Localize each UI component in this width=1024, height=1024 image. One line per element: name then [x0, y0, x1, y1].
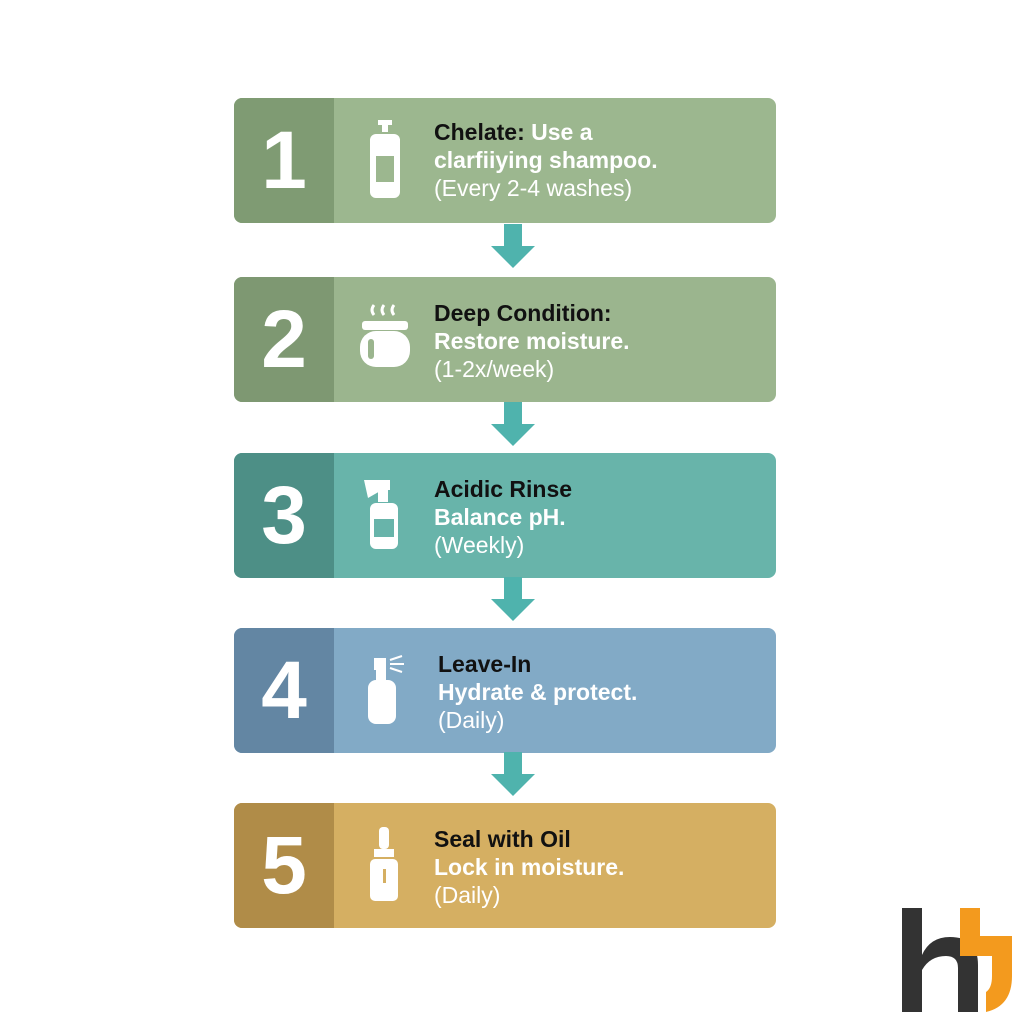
icon: mist spray [368, 655, 404, 724]
arrow 4 [491, 752, 535, 796]
text 4: Leave-In [438, 651, 531, 677]
step 1 card [234, 98, 776, 223]
text 2 [434, 300, 630, 382]
number 3 [234, 453, 334, 578]
logo [902, 908, 1012, 1012]
number 3: 3 [261, 470, 307, 561]
number 1 [234, 98, 334, 223]
text 2: (1-2x/week) [434, 356, 554, 382]
icon: shampoo bottle [370, 120, 400, 198]
text 4 [438, 651, 637, 733]
number 4: 4 [261, 645, 307, 736]
text 5: (Daily) [434, 882, 500, 908]
step 5 card [234, 803, 776, 928]
text 1 [434, 119, 658, 201]
text 5 [434, 826, 624, 908]
icon: dropper bottle [370, 827, 398, 901]
icon: spray bottle [364, 480, 398, 549]
text 2: Deep Condition: [434, 300, 612, 326]
arrow 3 [491, 577, 535, 621]
text 3: (Weekly) [434, 532, 524, 558]
number 5 [234, 803, 334, 928]
number 1: 1 [261, 115, 307, 206]
number 2 [234, 277, 334, 402]
number 5: 5 [261, 820, 307, 911]
arrow 2 [491, 402, 535, 446]
text 3: Acidic Rinse [434, 476, 572, 502]
step 2 card [234, 277, 776, 402]
arrow 1 [491, 224, 535, 268]
icon: conditioner jar [360, 304, 410, 367]
text 1: Chelate: Use a [434, 119, 593, 145]
step 3 card [234, 453, 776, 578]
text 2: Restore moisture. [434, 328, 630, 354]
number 2: 2 [261, 294, 307, 385]
text 3: Balance pH. [434, 504, 566, 530]
number 4 [234, 628, 334, 753]
text 4: Hydrate & protect. [438, 679, 637, 705]
text 1: (Every 2-4 washes) [434, 175, 632, 201]
step 4 card [234, 628, 776, 753]
text 4: (Daily) [438, 707, 504, 733]
text 1: clarfiiying shampoo. [434, 147, 658, 173]
text 3 [434, 476, 572, 558]
text 5: Lock in moisture. [434, 854, 624, 880]
text 5: Seal with Oil [434, 826, 571, 852]
